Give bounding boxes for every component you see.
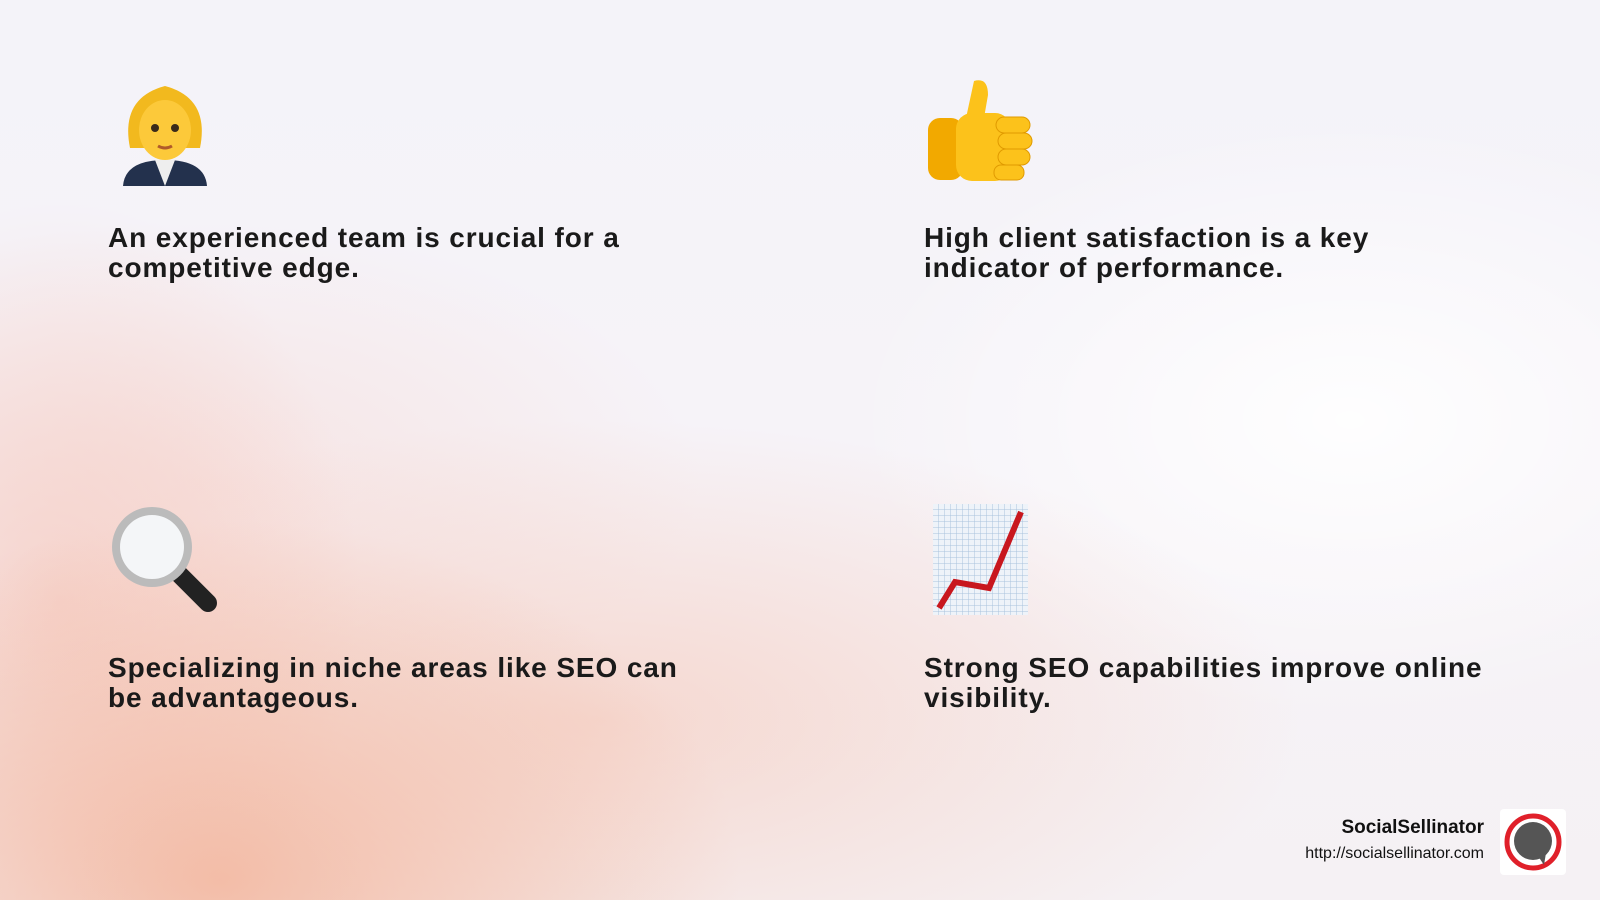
- text: SEO capabilities: visibility.: [924, 682, 1052, 713]
- text: experienced team: competitive edge.: [108, 252, 360, 283]
- icon: businesswoman: [123, 86, 207, 186]
- text: experienced team: An experienced team is crucial for a: [108, 222, 620, 253]
- text: SEO capabilities: Strong SEO capabilities improve online: [924, 652, 1483, 683]
- icon: magnifying glass: [112, 507, 217, 612]
- text: client satisfaction: indicator of performance.: [924, 252, 1284, 283]
- text: niche areas: Specializing in niche areas like SEO can: [108, 652, 678, 683]
- brand url: http://socialsellinator.com: [1305, 845, 1484, 862]
- icon: chart increasing: [933, 504, 1028, 615]
- text: client satisfaction: High client satisfaction is a key: [924, 222, 1369, 253]
- logo: [1500, 809, 1566, 875]
- footer: brand: [1305, 809, 1566, 875]
- brand name: SocialSellinator: [1341, 817, 1484, 838]
- text: experienced team: [108, 222, 620, 283]
- text: niche areas: [108, 652, 678, 713]
- icon: thumbs up: [928, 80, 1032, 181]
- text: client satisfaction: [924, 222, 1369, 283]
- text: SEO capabilities: [924, 652, 1483, 713]
- text: niche areas: be advantageous.: [108, 682, 359, 713]
